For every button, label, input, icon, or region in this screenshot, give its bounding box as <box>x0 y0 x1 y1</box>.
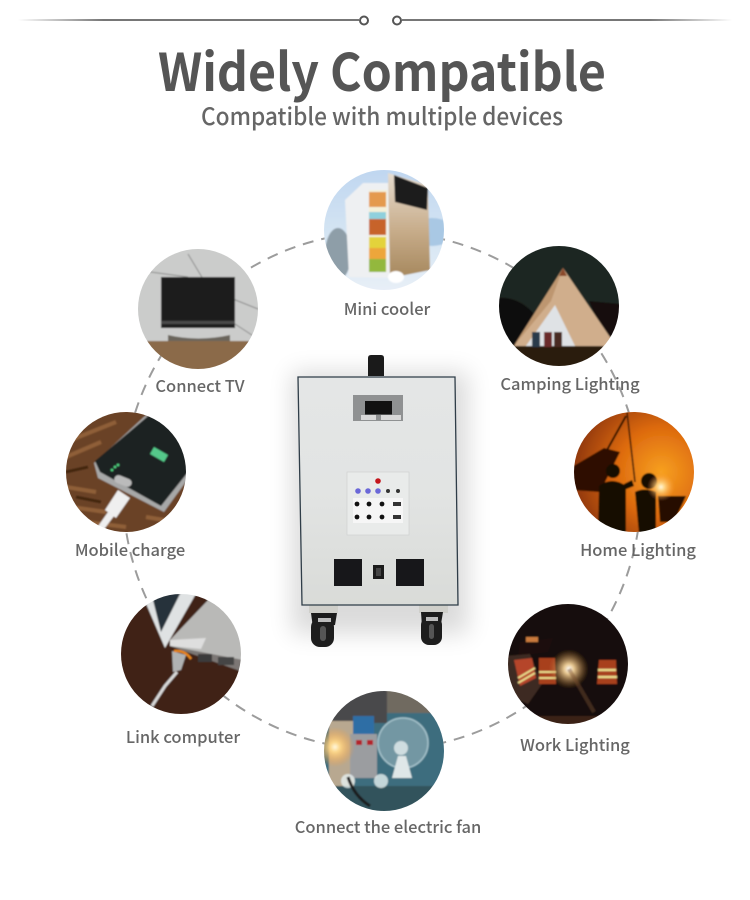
carry handle <box>368 355 384 376</box>
label: mobile charge: Mobile charge <box>75 537 185 561</box>
label: home lighting: Home Lighting <box>580 537 696 561</box>
label: link computer: Link computer <box>126 724 240 748</box>
item: link computer <box>119 592 245 716</box>
label: work lighting: Work Lighting <box>520 732 630 756</box>
label: camping lighting: Camping Lighting <box>500 371 640 395</box>
product shadow <box>292 372 468 634</box>
item: mobile charge <box>64 410 190 534</box>
header ornament <box>18 16 732 24</box>
cabinet body <box>298 377 458 605</box>
subtitle: Compatible with multiple devices <box>201 97 563 132</box>
label: mini cooler: Mini cooler <box>344 296 431 320</box>
casters <box>309 603 448 647</box>
title: Widely Compatible <box>158 31 606 106</box>
LCD meter <box>353 395 403 421</box>
control panel <box>347 472 409 535</box>
label: connect TV: Connect TV <box>155 373 245 397</box>
AC outlets and switch <box>334 559 424 586</box>
item: connect TV <box>136 247 260 371</box>
item: work lighting <box>506 602 630 726</box>
central product: power station <box>292 355 468 647</box>
item: camping lighting <box>497 244 621 368</box>
label: electric fan: Connect the electric fan <box>295 814 481 838</box>
item: mini cooler <box>324 170 444 290</box>
item: electric fan <box>324 691 444 811</box>
item: home lighting <box>572 410 696 534</box>
dashed connection ring <box>123 232 641 750</box>
